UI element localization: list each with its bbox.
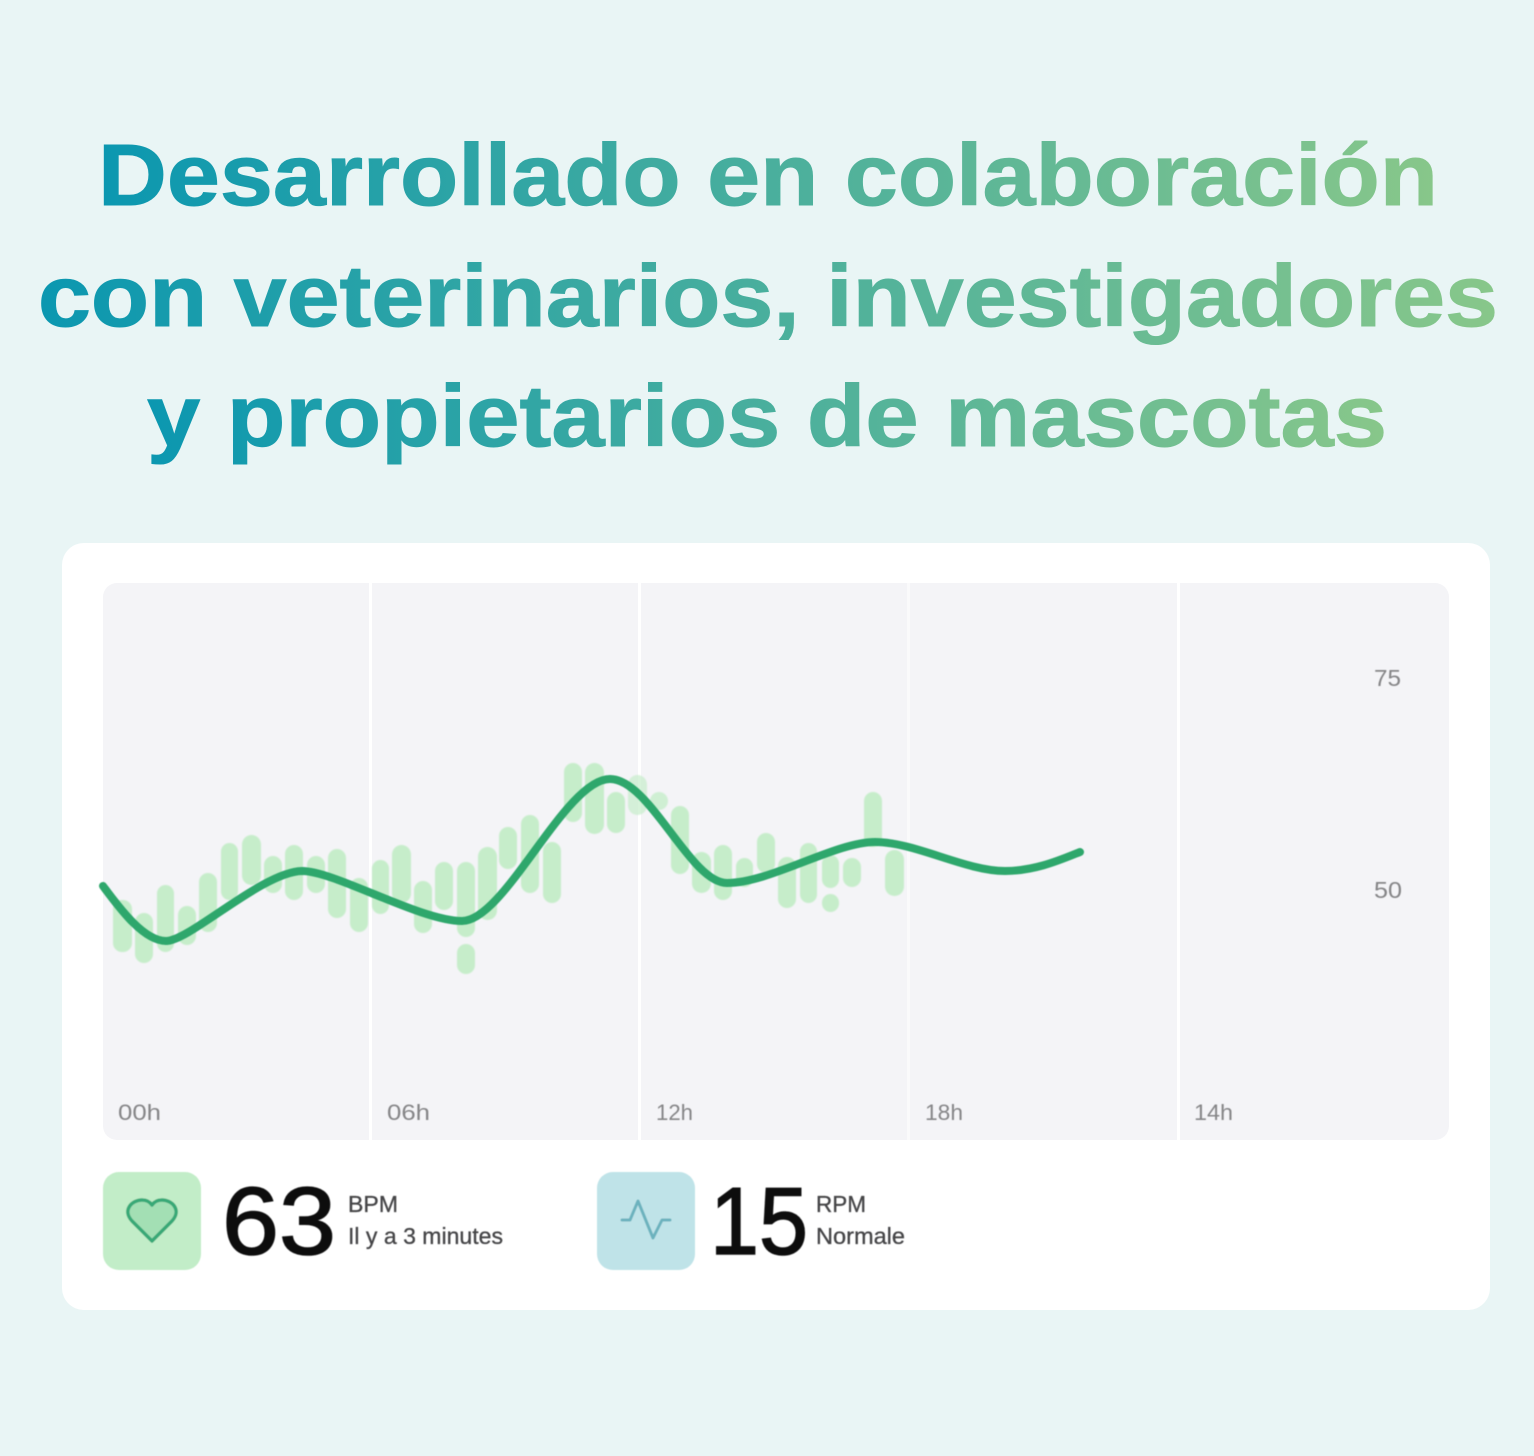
title: [38, 127, 1498, 465]
title: Desarrollado en colaboración: [98, 127, 1438, 224]
panel: monitoring card: [62, 543, 1490, 1310]
x axis labels: 14h: [1194, 1100, 1233, 1125]
x axis labels: 12h: [656, 1100, 693, 1125]
icon: heart: [103, 1172, 201, 1270]
label: time since reading: Il y a 3 minutes: [348, 1223, 503, 1249]
title: con veterinarios, investigadores: [38, 248, 1498, 345]
line chart: heart rate trend: [103, 779, 1080, 941]
x axis labels: 18h: [925, 1100, 963, 1125]
label: RPM: RPM: [816, 1191, 866, 1217]
label: BPM: BPM: [348, 1191, 398, 1217]
y axis labels: 75: [1374, 665, 1401, 691]
y axis labels: 50: [1374, 877, 1402, 903]
icon: pulse: [597, 1172, 695, 1270]
x axis labels: 06h: [387, 1100, 430, 1125]
y axis labels: [1374, 665, 1402, 903]
x axis labels: 00h: [118, 1100, 161, 1125]
panel: chart area: [103, 583, 1449, 1140]
label: status: Normale: [816, 1223, 905, 1249]
value: 63: 63: [222, 1168, 336, 1275]
bar chart: hourly range bars: [113, 763, 904, 974]
stat: respiration rate: [597, 1168, 905, 1275]
stat: heart rate: [103, 1168, 503, 1275]
x axis labels: [118, 1100, 1233, 1125]
title: y propietarios de mascotas: [147, 368, 1387, 465]
value: 15: 15: [710, 1168, 808, 1275]
